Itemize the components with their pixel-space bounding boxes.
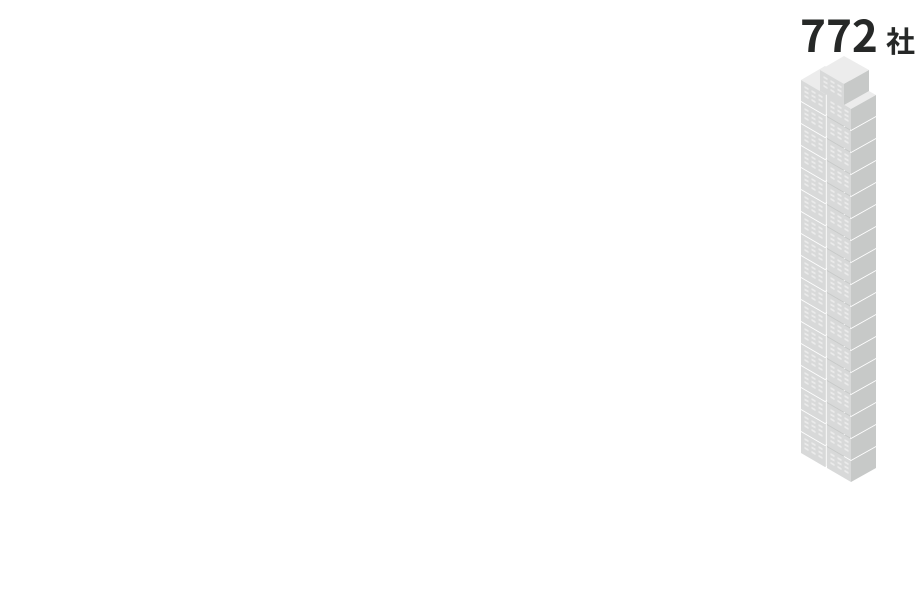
isometric tower of building blocks — [801, 56, 876, 482]
unit: 社: 社 — [886, 19, 915, 61]
count label: 772 社 — [800, 1, 915, 65]
number: 772: 772 — [800, 1, 878, 65]
top block — [820, 56, 869, 105]
back stack of blocks — [801, 66, 850, 467]
white gap between stacks — [826, 94, 827, 468]
front stack of blocks — [827, 81, 876, 482]
